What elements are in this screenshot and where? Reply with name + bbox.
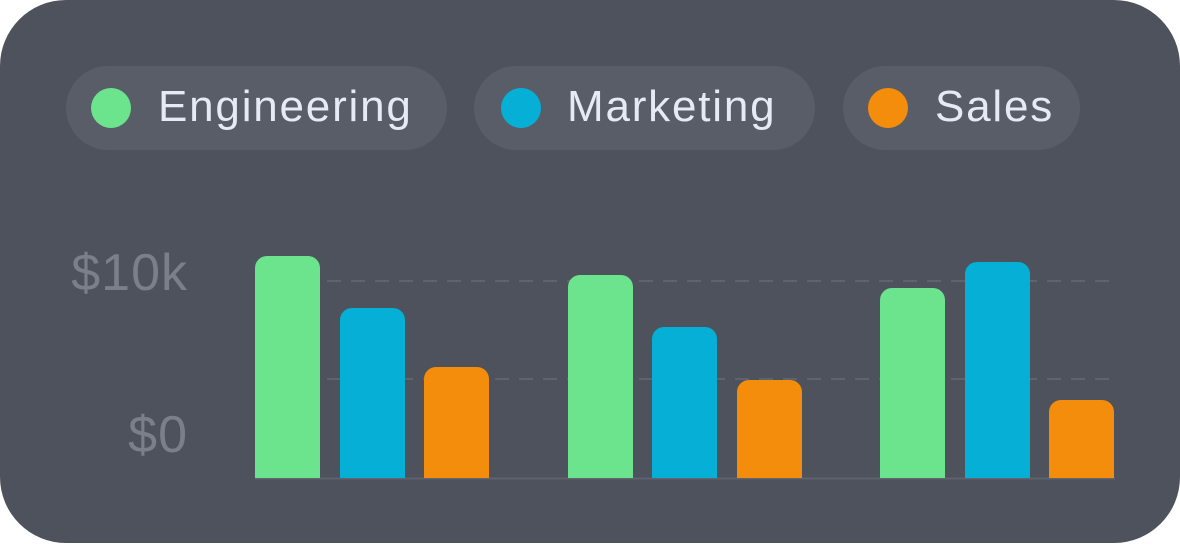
engineering label: Engineering [158, 82, 413, 131]
marketing dot [501, 88, 541, 128]
sales dot [868, 88, 908, 128]
legend: sales [843, 66, 1080, 150]
marketing label: Marketing [567, 82, 776, 131]
y-axis label 10k: $10k [71, 244, 188, 302]
legend: engineering [66, 66, 447, 150]
legend: marketing [474, 66, 815, 150]
sales label: Sales [935, 82, 1054, 131]
engineering dot [91, 88, 131, 128]
y-axis label 0: $0 [128, 406, 188, 464]
